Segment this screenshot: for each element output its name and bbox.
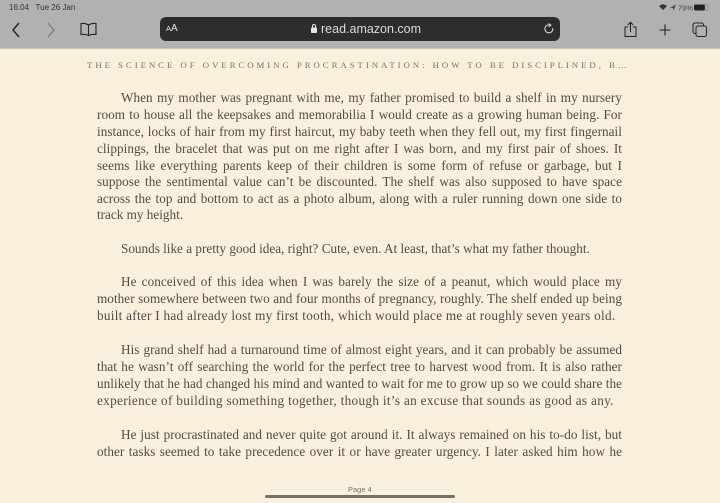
paragraph 1: When my mother was pregnant with me, my father promised to build a shelf in my nursery xyxy=(121,90,622,105)
lock icon xyxy=(311,24,317,33)
icon: back arrow xyxy=(12,22,20,38)
paragraph 1: track my height. xyxy=(97,207,183,222)
paragraph 4: His grand shelf had a turnaround time of almost eight years, and it can probably be assumed xyxy=(121,342,622,357)
paragraph 1: clippings, the bracelet that was put on me right after I was born, and my first pair of shoes. It xyxy=(97,141,622,156)
paragraph 1: suppose the sentimental value can’t be discounted. The shelf was also supposed to have space xyxy=(97,174,622,189)
icon: plus xyxy=(660,24,670,36)
page number: Page 4 xyxy=(348,485,372,494)
icon: reload xyxy=(544,23,554,34)
icon: share xyxy=(624,22,636,37)
icon: tabs xyxy=(692,22,707,37)
paragraph 2: Sounds like a pretty good idea, right? Cute, even. At least, that’s what my father thought. xyxy=(121,241,590,256)
home indicator xyxy=(265,495,455,498)
browser toolbar xyxy=(0,0,720,49)
status bar battery and wifi xyxy=(659,4,708,12)
icon: forward arrow xyxy=(48,22,55,38)
paragraph 4: experience of building something together, though it’s an excuse that sounds as good as any. xyxy=(97,393,614,408)
paragraph 1: instance, locks of hair from my first haircut, my baby teeth when they fell out, my first fingernail xyxy=(97,124,622,139)
paragraph 4: unlikely that he had changed his mind and wanted to wait for me to grow up so we could share the xyxy=(97,376,622,391)
paragraph 4: that he wasn’t off searching the world for the perfect tree to harvest wood from. It is also rather xyxy=(97,359,622,374)
status bar battery and wifi: 79% xyxy=(678,4,693,12)
address bar xyxy=(160,17,560,41)
paragraph 1: room to house all the keepsakes and memorabilia I would create as a growing human being. For xyxy=(97,107,622,122)
paragraph 3 xyxy=(97,274,622,323)
status bar time and date: 16:04 Tue 26 Jan xyxy=(9,3,75,12)
paragraph 5 xyxy=(97,427,622,459)
paragraph 4 xyxy=(97,342,622,408)
url: read.amazon.com xyxy=(321,22,421,36)
paragraph 3: mother somewhere between two and four months of pregnancy, roughly. The shelf ended up being xyxy=(97,291,622,306)
paragraph 3: He conceived of this idea when I was barely the size of a peanut, which would place my xyxy=(121,274,622,289)
paragraph 1: seems like everything parents keep of their children is some form of refuse or garbage, but I xyxy=(97,158,622,173)
paragraph 3: built after I had already lost my first tooth, which would place me at roughly seven years old. xyxy=(97,308,615,323)
paragraph 1: across the top and bottom to act as a photo album, along with a ruler running down one side to xyxy=(97,191,622,206)
running header: book title: THE SCIENCE OF OVERCOMING PROCRASTINATION: HOW TO BE DISCIPLINED, B… xyxy=(87,60,630,70)
text size control: AA xyxy=(166,23,178,34)
paragraph 1 xyxy=(97,90,622,222)
paragraph 5: other tasks seemed to take precedence over it or have greater urgency. I later asked him how he xyxy=(97,444,622,459)
icon: open book xyxy=(80,22,97,36)
paragraph 5: He just procrastinated and never quite got around it. It always remained on his to-do list, but xyxy=(121,427,622,442)
